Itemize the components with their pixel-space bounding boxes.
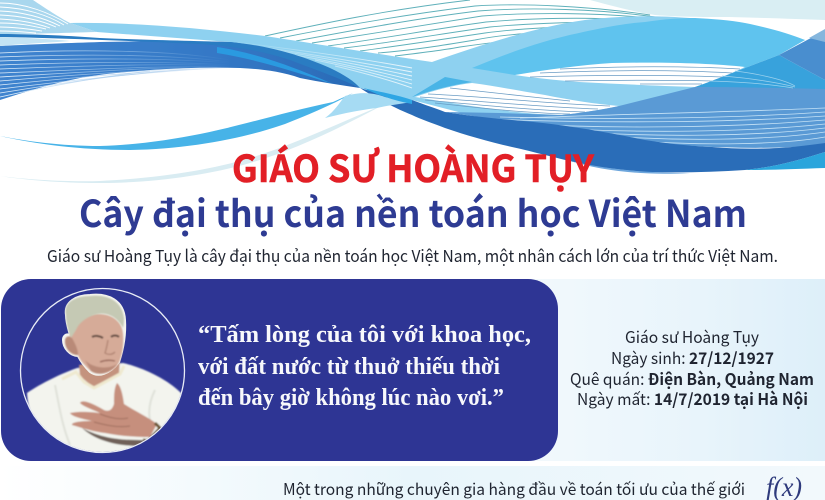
sky triangle — [412, 77, 472, 97]
eyes — [92, 336, 119, 338]
collar — [62, 366, 124, 388]
nose — [105, 340, 115, 354]
title: GIÁO SƯ HOÀNG TỤY — [232, 139, 595, 193]
sky blue ribbon — [472, 18, 805, 75]
fan lines — [0, 51, 230, 97]
swoosh crossing — [325, 93, 412, 118]
pale top band — [590, 0, 825, 20]
sticker outline — [63, 295, 125, 375]
mouth — [100, 360, 115, 362]
bright blue wedge — [695, 55, 825, 89]
quote text: với đất nước từ thuở thiếu thời — [198, 354, 500, 380]
sky blue lower swoosh — [0, 93, 353, 150]
pale corner wedge — [809, 29, 825, 42]
profile details: Ngày mất: 14/7/2019 tại Hà Nội — [577, 386, 808, 410]
profile details: Quê quán: Điện Bàn, Quảng Nam — [570, 366, 814, 390]
face — [65, 314, 123, 374]
swoosh bright crossing — [363, 88, 412, 104]
forearm shadow — [82, 428, 145, 446]
right fan lines — [490, 108, 825, 144]
quote text: “Tấm lòng của tôi với khoa học, — [198, 322, 531, 348]
panel: quote — [1, 279, 558, 461]
profile details — [570, 324, 814, 410]
wedge lines — [710, 71, 795, 88]
top right thin lines — [265, 0, 655, 56]
dark thin band — [0, 34, 360, 88]
profile details: Giáo sư Hoàng Tụy — [625, 324, 760, 348]
pale lower swoosh — [0, 104, 385, 183]
white lens lower — [415, 83, 619, 115]
right bright corner — [745, 152, 825, 170]
ribbon hatch lines — [235, 42, 412, 88]
quote text — [198, 322, 531, 411]
dark upper wedge — [779, 33, 825, 80]
shirt shading — [55, 385, 155, 445]
intro text: Giáo sư Hoàng Tụy là cây đại thụ của nền toán học Việt Nam, một nhân cách lớn của trí thức Việt Nam. — [47, 243, 778, 267]
mid blue right mass — [445, 86, 825, 148]
face shading — [65, 336, 117, 374]
top-left lines — [0, 3, 68, 33]
panel: pale info background — [0, 279, 825, 461]
neck — [79, 358, 120, 387]
light blue ribbon — [70, 16, 805, 118]
main dark blue ribbon — [360, 88, 825, 172]
bottom text: Một trong những chuyên gia hàng đầu về toán tối ưu của thế giới — [283, 476, 745, 500]
hand — [70, 383, 157, 437]
watch — [143, 423, 160, 441]
portrait photo — [20, 288, 184, 460]
under ribbon shadow — [570, 161, 690, 174]
bottom strip — [0, 466, 825, 500]
white lens upper — [515, 63, 745, 87]
lens lines — [420, 67, 740, 114]
quote text: đến bây giờ không lúc nào vơi.” — [198, 385, 504, 411]
pale band under dark band — [0, 37, 70, 46]
shirt — [27, 363, 181, 460]
subtitle: Cây đại thụ của nền toán học Việt Nam — [79, 184, 747, 238]
finger creases — [94, 414, 130, 427]
profile details: Ngày sinh: 27/12/1927 — [611, 345, 774, 369]
bright band accent — [217, 47, 333, 84]
wave banner — [0, 0, 825, 183]
top-left hatch — [0, 0, 97, 34]
left fan — [0, 41, 360, 100]
hair — [66, 296, 124, 338]
